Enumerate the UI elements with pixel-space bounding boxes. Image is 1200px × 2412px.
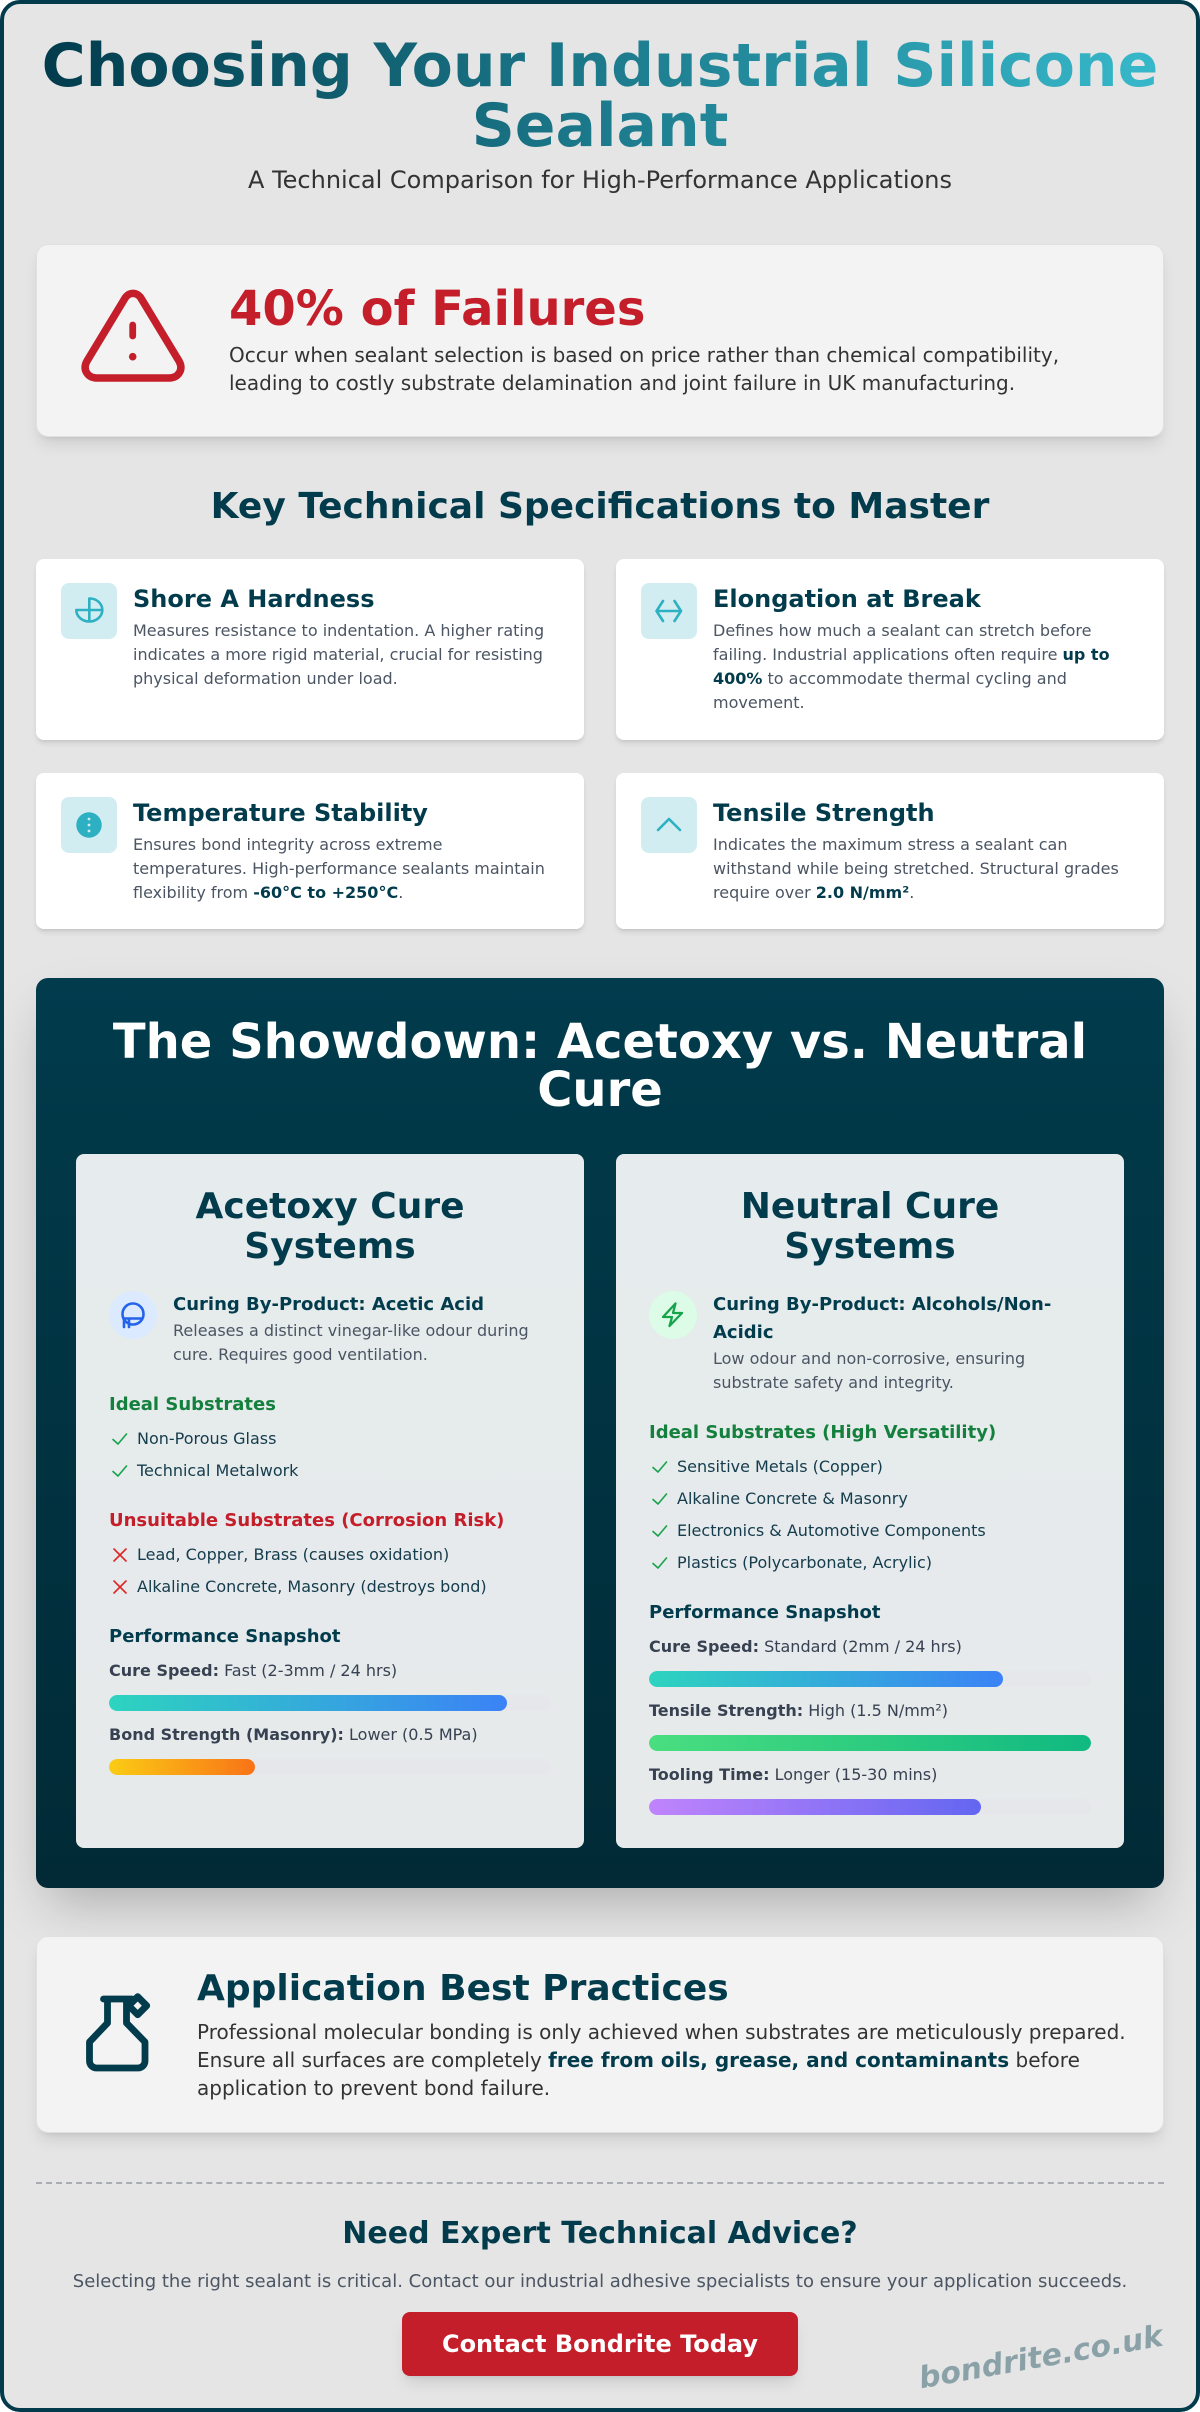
unsuitable substrates list: Lead, Copper, Brass (causes oxidation) — [137, 1545, 449, 1564]
icon: acid — [109, 1291, 157, 1339]
neutral heading: Systems — [784, 1226, 956, 1267]
button — [402, 2312, 798, 2376]
performance heading: Performance Snapshot — [649, 1602, 881, 1623]
curing by-product — [109, 1291, 529, 1364]
ideal substrates list: Technical Metalwork — [137, 1461, 298, 1480]
ideal substrates list — [112, 1429, 298, 1480]
spec text: indicates a more rigid material, crucial for resisting — [133, 645, 543, 664]
ideal substrates list — [652, 1457, 986, 1572]
footer text: Selecting the right sealant is critical. Contact our industrial adhesive specialists to ensure your application succeeds. — [73, 2271, 1127, 2292]
acetoxy heading — [196, 1186, 464, 1267]
footer heading: Need Expert Technical Advice? — [342, 2216, 858, 2251]
bar: cure speed — [649, 1637, 1003, 1687]
callout text — [229, 281, 1059, 395]
neutral heading: Neutral Cure — [741, 1186, 999, 1227]
header — [42, 31, 1158, 194]
acetoxy heading: Systems — [244, 1226, 416, 1267]
unsuitable substrates heading: Unsuitable Substrates (Corrosion Risk) — [109, 1510, 504, 1531]
spec text: withstand while being stretched. Structural grades — [713, 859, 1119, 878]
best practices body — [197, 2020, 1126, 2100]
bar: tensile strength: Tensile Strength: High (1.5 N/mm²) — [649, 1701, 948, 1720]
curing by-product: substrate safety and integrity. — [713, 1373, 954, 1392]
icon: double arrow — [641, 583, 697, 639]
spec text: physical deformation under load. — [133, 669, 398, 688]
bar: bond strength — [109, 1725, 478, 1775]
spec text: require over 2.0 N/mm². — [713, 883, 914, 902]
showdown heading: The Showdown: Acetoxy vs. Neutral — [113, 1014, 1087, 1070]
spec text: Tensile Strength — [713, 799, 935, 827]
spec text: Elongation at Break — [713, 585, 981, 613]
watermark: bondrite.co.uk — [916, 2319, 1166, 2396]
ideal substrates list: Electronics & Automotive Components — [677, 1521, 986, 1540]
best practices body: Ensure all surfaces are completely free from oils, grease, and contaminants before — [197, 2048, 1080, 2072]
panel: 40% of failures callout — [36, 244, 1164, 437]
spec text: failing. Industrial applications often require up to — [713, 645, 1110, 664]
spec text: 400% to accommodate thermal cycling and — [713, 669, 1067, 688]
performance heading: Performance Snapshot — [109, 1626, 341, 1647]
curing by-product — [649, 1291, 1051, 1392]
spec text — [713, 799, 1119, 902]
spec text — [133, 799, 545, 902]
heading: key specifications: Key Technical Specifications to Master — [211, 486, 989, 527]
unsuitable substrates list: Alkaline Concrete, Masonry (destroys bond) — [137, 1577, 487, 1596]
callout body — [229, 343, 1059, 395]
curing by-product: cure. Requires good ventilation. — [173, 1345, 428, 1364]
callout heading: 40% of Failures — [229, 281, 645, 337]
ideal substrates heading: Ideal Substrates — [109, 1394, 276, 1415]
curing by-product: Acidic — [713, 1322, 774, 1343]
ideal substrates list: Non-Porous Glass — [137, 1429, 276, 1448]
neutral heading — [741, 1186, 999, 1267]
spec text: Temperature Stability — [133, 799, 428, 827]
bar: tensile strength — [649, 1701, 1091, 1751]
curing by-product: Low odour and non-corrosive, ensuring — [713, 1349, 1025, 1368]
panel: Temperature Stability — [36, 773, 584, 929]
icon: flask — [86, 1993, 150, 2072]
icon: warning triangle — [81, 290, 185, 382]
title: Sealant — [472, 91, 728, 161]
panel: Tensile Strength — [616, 773, 1164, 929]
best practices body: application to prevent bond failure. — [197, 2076, 550, 2100]
ideal substrates list: Alkaline Concrete & Masonry — [677, 1489, 908, 1508]
bar: cure speed: Cure Speed: Standard (2mm / 24 hrs) — [649, 1637, 962, 1656]
spec text: flexibility from -60°C to +250°C. — [133, 883, 403, 902]
bar: cure speed: Cure Speed: Fast (2-3mm / 24 hrs) — [109, 1661, 397, 1680]
spec text: Indicates the maximum stress a sealant can — [713, 835, 1067, 854]
panel: showdown — [36, 978, 1164, 1888]
icon: chevron up — [641, 797, 697, 853]
subtitle: A Technical Comparison for High-Performance Applications — [248, 166, 952, 194]
unsuitable substrates list — [113, 1545, 487, 1596]
icon: bolt — [649, 1291, 697, 1339]
spec text: movement. — [713, 693, 805, 712]
panel: Elongation at Break — [616, 559, 1164, 740]
bar: bond strength: Bond Strength (Masonry): Lower (0.5 MPa) — [109, 1725, 478, 1744]
showdown heading: Cure — [537, 1062, 663, 1118]
callout body: Occur when sealant selection is based on price rather than chemical compatibility, — [229, 343, 1059, 367]
bar: tooling time: Tooling Time: Longer (15-30 mins) — [649, 1765, 937, 1784]
showdown heading — [113, 1014, 1087, 1118]
bar: cure speed — [109, 1661, 507, 1711]
spec text: temperatures. High-performance sealants maintain — [133, 859, 545, 878]
spec text — [133, 585, 544, 688]
button: Contact Bondrite Today — [442, 2330, 758, 2358]
spec text — [713, 585, 1110, 712]
spec text: Defines how much a sealant can stretch before — [713, 621, 1091, 640]
panel: neutral cure — [616, 1154, 1124, 1848]
panel: acetoxy cure — [76, 1154, 584, 1848]
title: Choosing Your Industrial Silicone — [42, 31, 1158, 101]
footer: call to action — [73, 2216, 1127, 2386]
callout body: leading to costly substrate delamination and joint failure in UK manufacturing. — [229, 371, 1015, 395]
icon: dotted circle — [61, 797, 117, 853]
ideal substrates heading: Ideal Substrates (High Versatility) — [649, 1422, 996, 1443]
curing by-product: Releases a distinct vinegar-like odour during — [173, 1321, 529, 1340]
spec text: Shore A Hardness — [133, 585, 374, 613]
acetoxy heading: Acetoxy Cure — [196, 1186, 464, 1227]
spec text: Measures resistance to indentation. A higher rating — [133, 621, 544, 640]
best practices body: Professional molecular bonding is only achieved when substrates are meticulously prepared. — [197, 2020, 1126, 2044]
best practices text — [197, 1968, 1126, 2100]
panel: Shore A Hardness — [36, 559, 584, 740]
bar: tooling time — [649, 1765, 981, 1815]
panel: application best practices — [36, 1936, 1164, 2133]
ideal substrates list: Plastics (Polycarbonate, Acrylic) — [677, 1553, 932, 1572]
curing by-product: Curing By-Product: Acetic Acid — [173, 1294, 484, 1315]
icon: pie — [61, 583, 117, 639]
ideal substrates list: Sensitive Metals (Copper) — [677, 1457, 883, 1476]
spec text: Ensures bond integrity across extreme — [133, 835, 442, 854]
curing by-product: Curing By-Product: Alcohols/Non- — [713, 1294, 1051, 1315]
title — [36, 36, 1164, 156]
best practices heading: Application Best Practices — [197, 1968, 729, 2009]
